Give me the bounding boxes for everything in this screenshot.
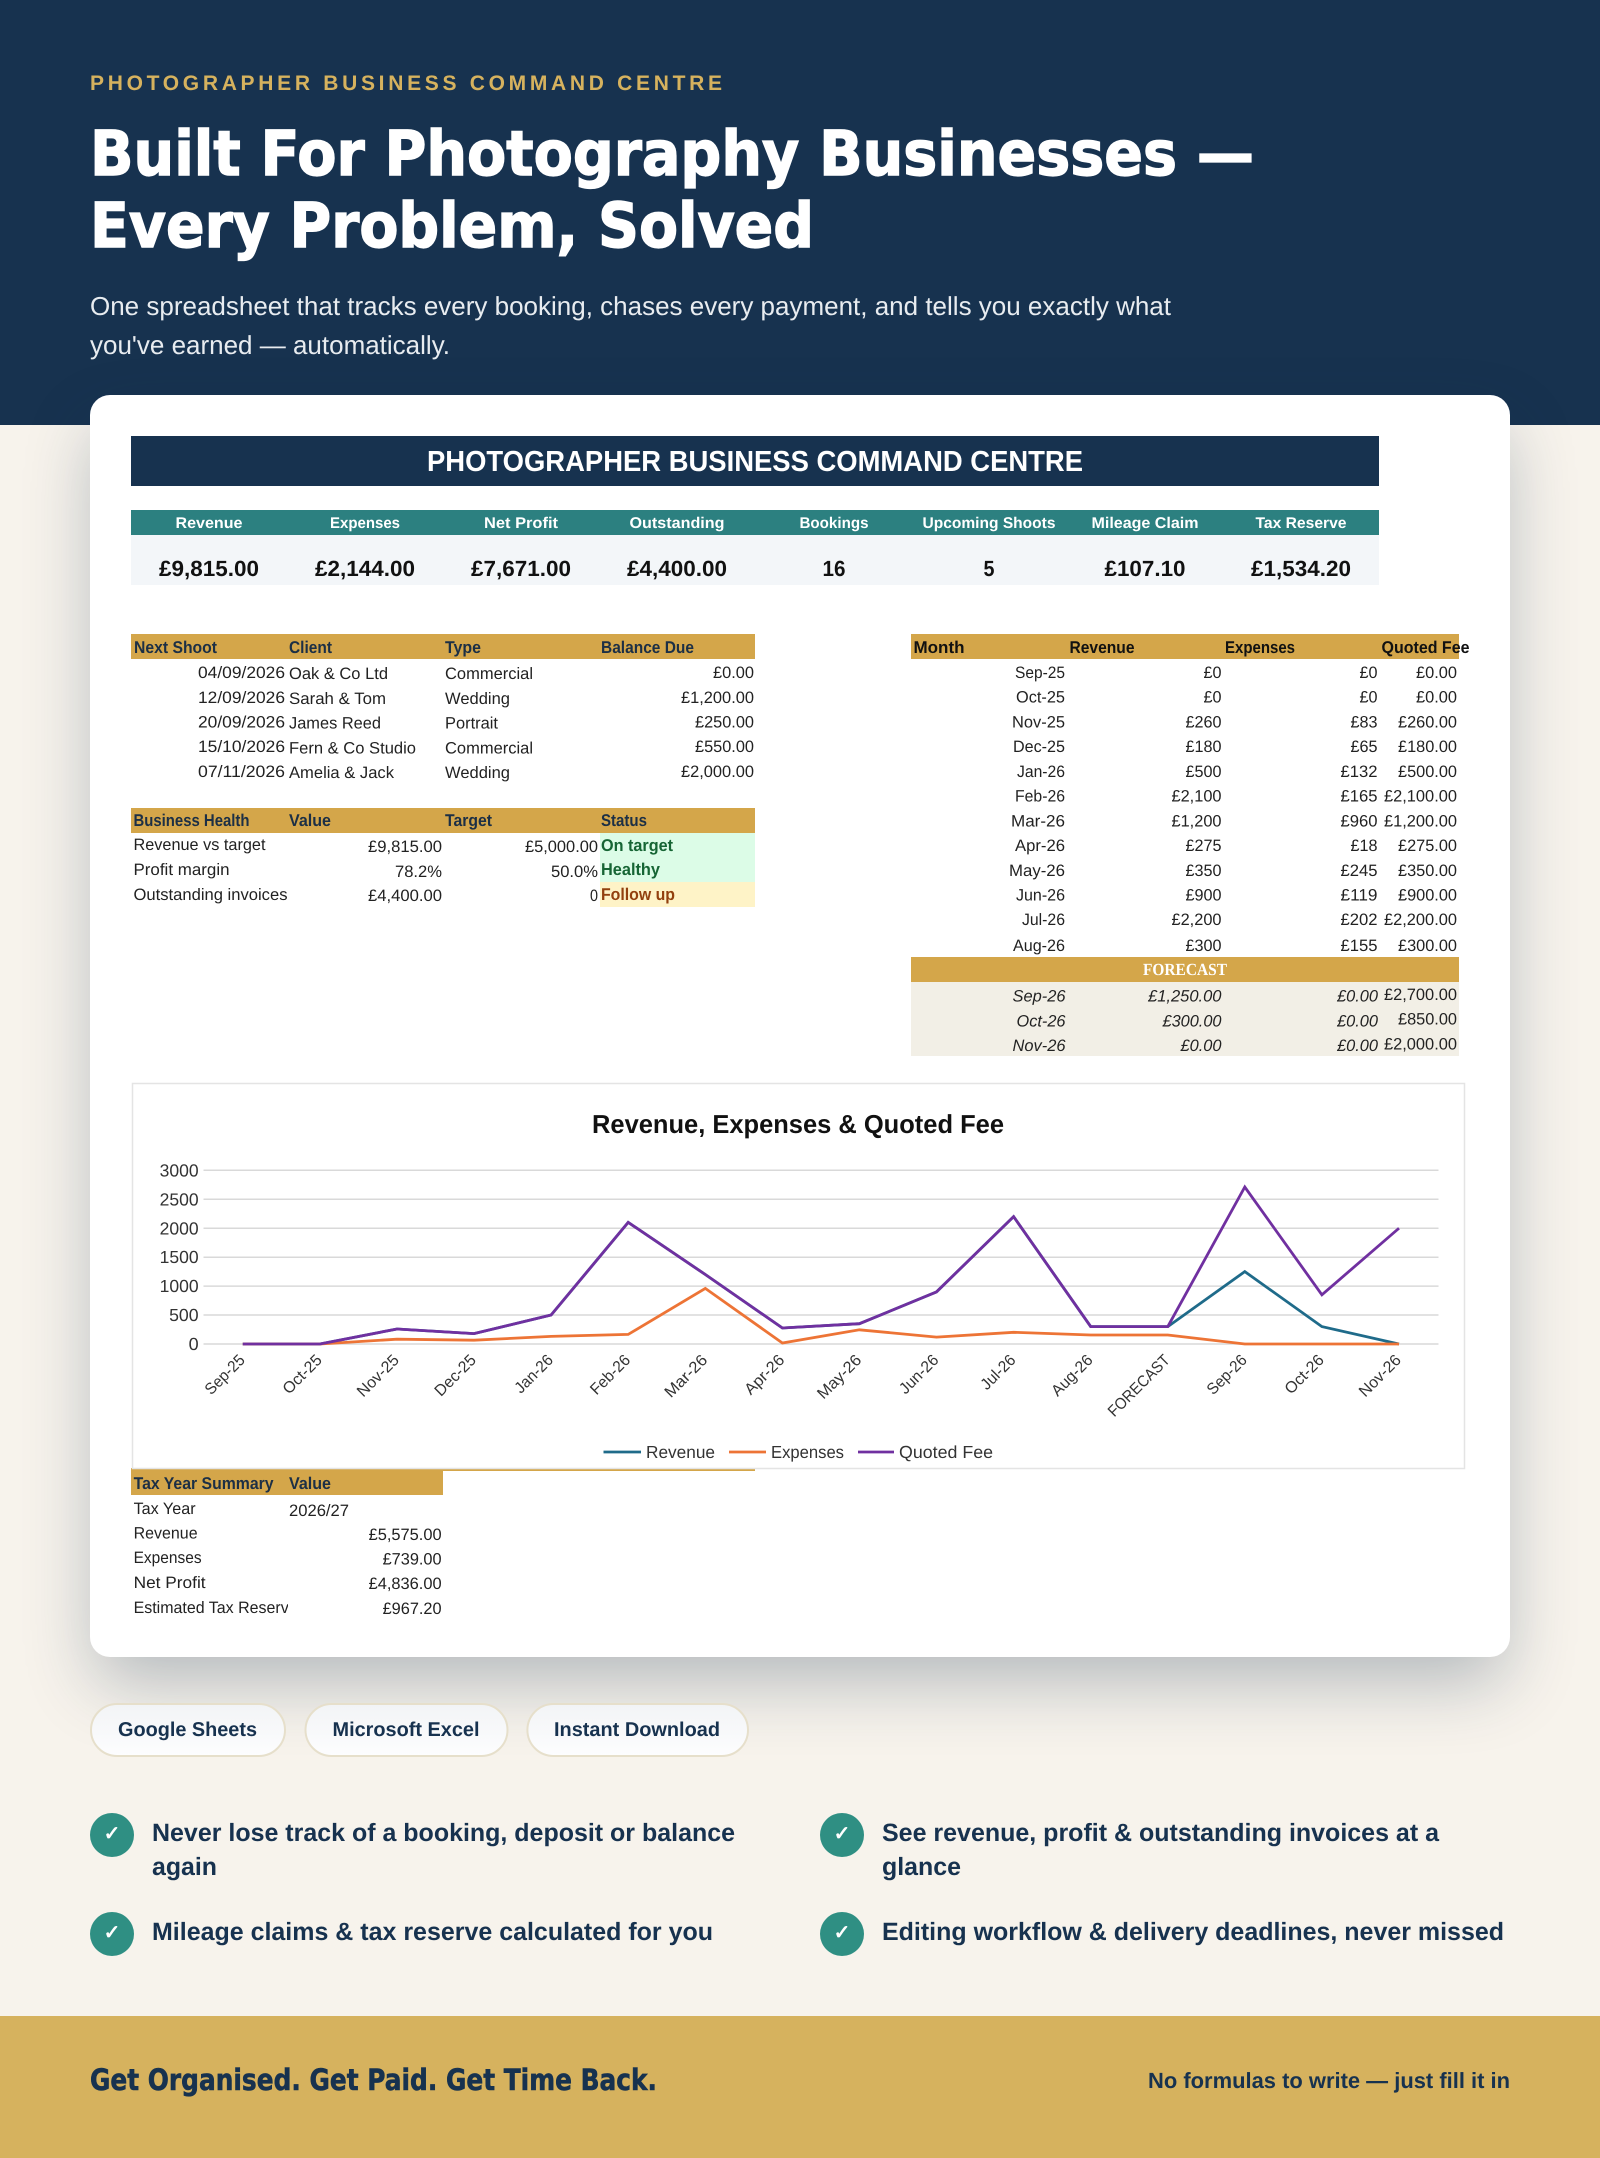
table: monthly figures: £2,100 [1172, 788, 1222, 806]
x axis labels: Mar-26 [662, 1352, 711, 1401]
header band [0, 0, 1600, 425]
table: business health: Status [601, 811, 647, 830]
table: monthly figures: £245 [1340, 862, 1378, 880]
sheet title bar: PHOTOGRAPHER BUSINESS COMMAND CENTRE [427, 446, 1083, 478]
x axis labels: FORECAST [1105, 1352, 1174, 1420]
benefit: editing workflow: Editing workflow & delivery deadlines, never missed [882, 1918, 1504, 1946]
KPI strip: Outstanding [630, 515, 724, 532]
pill: Google Sheets: Google Sheets [118, 1719, 257, 1741]
x axis labels: Aug-26 [1048, 1352, 1097, 1400]
table: monthly figures: Apr-26 [1015, 837, 1065, 855]
KPI strip: £2,144.00 [315, 556, 415, 581]
x axis labels: Feb-26 [587, 1352, 634, 1398]
y axis labels: 1000 [160, 1276, 199, 1296]
x axis labels: Oct-25 [280, 1352, 326, 1398]
KPI strip: Net Profit [484, 515, 558, 532]
y axis labels: 3000 [160, 1160, 199, 1180]
table: monthly figures: £1,250.00 [1147, 988, 1222, 1006]
KPI strip: £9,815.00 [159, 556, 259, 581]
benefit: bookings [90, 1813, 735, 1881]
sheet title bar [131, 436, 1379, 486]
table: monthly figures: Sep-26 [1012, 988, 1066, 1006]
table: upcoming shoots: Type [445, 638, 481, 657]
y axis labels: 0 [189, 1334, 199, 1354]
benefit: revenue at a glance: See revenue, profit & outstanding invoices at a [882, 1819, 1440, 1847]
table: tax year summary: Tax Year [134, 1500, 196, 1518]
table: upcoming shoots: 12/09/2026 [198, 689, 285, 707]
table: upcoming shoots: James Reed [289, 715, 381, 733]
table: monthly figures: £18 [1350, 837, 1378, 855]
table: monthly figures: Feb-26 [1015, 788, 1065, 806]
x axis labels: Sep-26 [1204, 1352, 1251, 1398]
KPI strip: £7,671.00 [471, 556, 571, 581]
y axis labels: 1500 [160, 1247, 199, 1267]
table: monthly figures: Oct-25 [1016, 689, 1065, 707]
benefit: mileage and tax: Mileage claims & tax reserve calculated for you [152, 1918, 713, 1946]
title: Built For Photography Businesses — [90, 117, 1254, 190]
table: upcoming shoots [131, 634, 755, 782]
KPI strip [131, 510, 1379, 585]
table: upcoming shoots: 20/09/2026 [198, 714, 285, 732]
table: monthly figures: Quoted Fee [1382, 638, 1470, 657]
KPI strip: Tax Reserve [1256, 515, 1347, 532]
table: business health: On target [601, 836, 673, 855]
table: business health: Healthy [601, 860, 661, 879]
panel: spreadsheet card [90, 395, 1510, 1657]
table: upcoming shoots: Commercial [445, 739, 533, 757]
table: monthly figures: £165 [1340, 788, 1378, 806]
KPI strip: Expenses [330, 515, 400, 532]
table: upcoming shoots: £550.00 [695, 738, 754, 756]
table: business health: £5,000.00 [525, 838, 598, 856]
table: monthly figures: £65 [1350, 738, 1378, 756]
table: monthly figures: £2,200 [1172, 911, 1222, 929]
table: upcoming shoots: Portrait [445, 715, 498, 733]
table: business health [131, 808, 755, 907]
table: monthly figures: £132 [1340, 763, 1378, 781]
table: business health: Outstanding invoices [134, 886, 288, 904]
x axis labels: Nov-25 [354, 1352, 403, 1401]
KPI strip: 16 [822, 556, 846, 581]
table: monthly figures: £0.00 [1336, 988, 1379, 1006]
table: tax year summary: £967.20 [383, 1600, 442, 1618]
table: upcoming shoots: £2,000.00 [681, 763, 754, 781]
table: upcoming shoots: Oak & Co Ltd [289, 665, 388, 683]
chart legend: Revenue [646, 1442, 715, 1462]
x axis labels: Sep-25 [202, 1352, 249, 1398]
table: upcoming shoots: £250.00 [695, 714, 754, 732]
table: upcoming shoots: 15/10/2026 [198, 738, 285, 756]
table: monthly figures: £83 [1350, 713, 1378, 731]
title: Every Problem, Solved [90, 189, 814, 262]
table: monthly figures: £500 [1186, 763, 1222, 781]
table: business health: Target [445, 811, 492, 830]
table: monthly figures: Jul-26 [1022, 911, 1065, 929]
table: business health: 78.2% [395, 863, 442, 881]
table: monthly figures: £275.00 [1398, 837, 1457, 855]
x axis labels: Jan-26 [512, 1352, 557, 1397]
table: monthly figures: Month [914, 638, 964, 657]
KPI strip: £4,400.00 [627, 556, 727, 581]
table: monthly figures: £850.00 [1398, 1011, 1457, 1029]
table: upcoming shoots: 04/09/2026 [198, 664, 285, 682]
benefit: revenue at a glance: glance [882, 1853, 961, 1881]
table: monthly figures: Expenses [1225, 638, 1295, 657]
chart legend: Expenses [771, 1442, 844, 1462]
pill: Instant Download: Instant Download [554, 1719, 720, 1741]
x axis labels: Jun-26 [896, 1352, 942, 1398]
table: upcoming shoots: Wedding [445, 690, 510, 708]
table: monthly figures: £180 [1186, 738, 1222, 756]
table: upcoming shoots: Amelia & Jack [289, 764, 395, 782]
KPI strip: £1,534.20 [1251, 556, 1351, 581]
benefit: bookings: again [152, 1853, 217, 1881]
table: upcoming shoots: Commercial [445, 665, 533, 683]
table: monthly figures: £2,000.00 [1384, 1035, 1457, 1053]
table: monthly figures: £350 [1186, 862, 1222, 880]
table: monthly figures: Nov-26 [1012, 1037, 1066, 1055]
table: monthly figures: Sep-25 [1015, 664, 1065, 682]
table: monthly figures: £0 [1204, 689, 1222, 707]
table: monthly figures: £202 [1340, 911, 1378, 929]
table: business health: Business Health [134, 811, 250, 830]
table: upcoming shoots: Next Shoot [134, 638, 217, 657]
table: monthly figures: £0.00 [1416, 664, 1457, 682]
benefit: bookings: Never lose track of a booking, deposit or balance [152, 1819, 735, 1847]
table: tax year summary: £5,575.00 [369, 1526, 442, 1544]
table: monthly figures: £2,700.00 [1384, 986, 1457, 1004]
table: business health: 0 [590, 887, 598, 905]
table: monthly figures: £0.00 [1336, 1012, 1379, 1030]
table: monthly figures: £300.00 [1398, 937, 1457, 955]
x axis labels: Jul-26 [978, 1352, 1019, 1394]
subtitle [90, 291, 1172, 360]
x axis labels: Nov-26 [1356, 1352, 1405, 1401]
benefit: editing workflow [820, 1912, 1504, 1956]
table: upcoming shoots: Sarah & Tom [289, 690, 386, 708]
x axis labels [202, 1352, 1405, 1420]
line: quoted fee [243, 1187, 1399, 1344]
footer band [0, 2016, 1600, 2158]
table: tax year summary: Revenue [134, 1525, 198, 1543]
table: monthly figures: £1,200 [1172, 812, 1222, 830]
benefit: editing workflow: ✓ [834, 1922, 850, 1944]
table: tax year summary: Tax Year Summary [134, 1474, 274, 1493]
table: tax year summary [131, 1470, 443, 1618]
y axis labels: 2000 [160, 1218, 199, 1238]
table: monthly figures: £0.00 [1180, 1037, 1222, 1055]
line: expenses [243, 1288, 1399, 1344]
x axis labels: Dec-25 [432, 1352, 480, 1400]
table: monthly figures: £300.00 [1162, 1012, 1222, 1030]
table: business health: £9,815.00 [368, 838, 442, 856]
benefit: bookings: ✓ [104, 1823, 120, 1845]
table: tax year summary: 2026/27 [289, 1502, 349, 1520]
table: tax year summary: Expenses [134, 1549, 202, 1567]
table: monthly figures: Oct-26 [1016, 1012, 1066, 1030]
table: monthly figures: £260.00 [1398, 713, 1457, 731]
KPI strip: Mileage Claim [1092, 515, 1198, 532]
chart legend [604, 1442, 993, 1462]
title [90, 117, 1254, 262]
table: tax year summary: £739.00 [383, 1550, 442, 1568]
x axis labels: May-26 [814, 1352, 865, 1403]
table: business health: £4,400.00 [368, 887, 442, 905]
table: upcoming shoots: Client [289, 638, 332, 657]
table: monthly figures: Jan-26 [1017, 763, 1065, 781]
table: monthly figures: £1,200.00 [1384, 812, 1457, 830]
table: monthly figures: £300 [1186, 937, 1222, 955]
table: upcoming shoots: £1,200.00 [681, 689, 754, 707]
table: business health: Follow up [601, 885, 675, 904]
x axis labels: Apr-26 [742, 1352, 788, 1398]
table: monthly figures: FORECAST [1143, 960, 1228, 979]
chart title: Revenue, Expenses & Quoted Fee [592, 1109, 1004, 1139]
chart legend: Quoted Fee [899, 1442, 993, 1462]
table: monthly figures: £0.00 [1416, 689, 1457, 707]
footer tagline: Get Organised. Get Paid. Get Time Back. [90, 2063, 657, 2097]
pill: Microsoft Excel: Microsoft Excel [332, 1719, 480, 1741]
y axis labels: 2500 [160, 1189, 199, 1209]
x axis labels: Oct-26 [1282, 1352, 1328, 1398]
table: tax year summary: £4,836.00 [369, 1575, 442, 1593]
table: monthly figures: Dec-25 [1013, 738, 1065, 756]
table: business health: Revenue vs target [134, 836, 266, 854]
table: monthly figures: £180.00 [1398, 738, 1457, 756]
table: upcoming shoots: Balance Due [601, 638, 694, 657]
table: monthly figures: £900.00 [1398, 886, 1457, 904]
table: business health: Profit margin [134, 861, 230, 879]
KPI strip: 5 [984, 556, 994, 581]
table: monthly figures: £260 [1186, 713, 1222, 731]
table: upcoming shoots: Fern & Co Studio [289, 739, 416, 757]
benefit: mileage and tax: ✓ [104, 1922, 120, 1944]
table: monthly figures: £275 [1186, 837, 1222, 855]
table: monthly figures: £0 [1360, 664, 1378, 682]
footer note: No formulas to write — just fill it in [1148, 2068, 1510, 2093]
KPI strip: Upcoming Shoots [922, 515, 1056, 532]
subtitle: One spreadsheet that tracks every booking, chases every payment, and tells you exactly what [90, 291, 1172, 321]
table: business health: Value [289, 811, 331, 830]
chart: revenue, expenses and quoted fee [132, 1084, 1464, 1468]
benefit: revenue at a glance [820, 1813, 1440, 1881]
table: monthly figures: £2,200.00 [1384, 911, 1457, 929]
line: revenue [243, 1217, 1399, 1344]
KPI strip: Revenue [176, 515, 243, 532]
table: monthly figures: £960 [1340, 812, 1378, 830]
table: monthly figures: £0 [1204, 664, 1222, 682]
table: monthly figures: £2,100.00 [1384, 788, 1457, 806]
table: upcoming shoots: Wedding [445, 764, 510, 782]
KPI strip: Bookings [800, 515, 868, 532]
table: monthly figures: Mar-26 [1011, 812, 1065, 830]
benefit: mileage and tax [90, 1912, 713, 1956]
benefit: revenue at a glance: ✓ [834, 1823, 850, 1845]
KPI strip: £107.10 [1104, 556, 1186, 581]
table: monthly figures: Aug-26 [1013, 937, 1065, 955]
y axis labels: 500 [169, 1305, 199, 1325]
table: monthly figures: Nov-25 [1012, 713, 1065, 731]
kicker label: PHOTOGRAPHER BUSINESS COMMAND CENTRE [90, 72, 722, 95]
table: monthly figures: £0.00 [1336, 1037, 1379, 1055]
subtitle: you've earned — automatically. [90, 330, 450, 360]
accent line under chart [131, 1468, 755, 1471]
pill: Instant Download [527, 1704, 748, 1756]
table: monthly figures: £155 [1340, 937, 1378, 955]
table: monthly figures [911, 634, 1470, 1056]
pill: Google Sheets [91, 1704, 285, 1756]
table: tax year summary: Net Profit [134, 1574, 206, 1592]
table: business health: 50.0% [551, 863, 598, 881]
table: monthly figures: Jun-26 [1016, 886, 1065, 904]
table: monthly figures: May-26 [1009, 862, 1065, 880]
table: monthly figures: £500.00 [1398, 763, 1457, 781]
y axis labels [160, 1160, 199, 1354]
table: monthly figures: £350.00 [1398, 862, 1457, 880]
table: upcoming shoots: 07/11/2026 [198, 763, 285, 781]
table: monthly figures: £900 [1186, 886, 1222, 904]
table: monthly figures: Revenue [1070, 638, 1134, 657]
table: monthly figures: £0 [1360, 689, 1378, 707]
pill: Microsoft Excel [306, 1704, 508, 1756]
table: upcoming shoots: £0.00 [713, 664, 754, 682]
table: tax year summary: Value [289, 1474, 331, 1493]
table: tax year summary: Estimated Tax Reserve [134, 1599, 298, 1617]
table: monthly figures: £119 [1340, 886, 1378, 904]
